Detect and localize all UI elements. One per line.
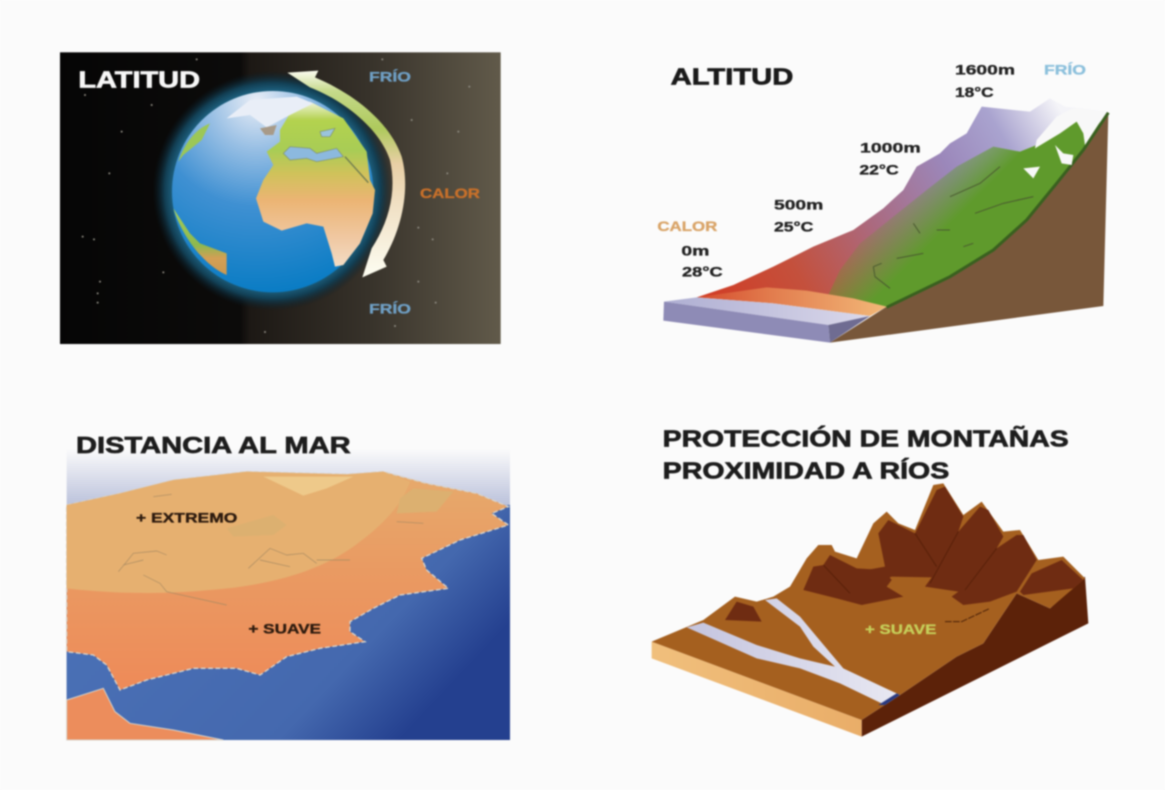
british isles xyxy=(260,125,277,135)
south america xyxy=(173,208,227,275)
label: 500m: 500m xyxy=(774,197,823,213)
arrow: temperature arc xyxy=(287,71,405,277)
green forest zone xyxy=(828,113,1108,307)
label: 0m: 0m xyxy=(681,242,709,258)
label: frio top: FRÍO xyxy=(369,69,411,85)
southern land xyxy=(67,688,223,740)
inland zone xyxy=(67,472,410,593)
panel: distancia al mar xyxy=(67,432,510,740)
eurasia and africa land xyxy=(256,102,375,267)
title: latitud: LATITUD xyxy=(78,67,200,93)
label: 18C: 18°C xyxy=(955,84,994,100)
slope climate gradient xyxy=(697,98,1108,307)
title line: proteccion de montanas: PROTECCIÓN DE MONTAÑAS xyxy=(663,426,1069,452)
ridge creases xyxy=(823,532,997,593)
plateau tone xyxy=(227,488,453,537)
right mountain shadow xyxy=(1020,560,1083,595)
stars xyxy=(82,58,470,333)
coastal shelf xyxy=(663,297,870,343)
snow patches xyxy=(1023,108,1107,178)
shelf top xyxy=(664,297,870,325)
space background xyxy=(60,52,501,344)
title: distancia al mar: DISTANCIA AL MAR xyxy=(76,432,351,458)
rivers xyxy=(687,598,900,705)
sky xyxy=(67,448,510,740)
river mouth xyxy=(878,693,900,705)
main mountain shadow xyxy=(867,487,1037,605)
black sea xyxy=(320,128,335,137)
globe xyxy=(153,71,393,311)
label: 1000m: 1000m xyxy=(860,139,921,155)
ridge line xyxy=(945,608,990,622)
shelf side xyxy=(828,316,870,343)
label: frio bottom: FRÍO xyxy=(369,300,411,316)
label: calor: CALOR xyxy=(420,185,480,201)
label: 22C: 22°C xyxy=(859,161,899,177)
light northern area xyxy=(263,477,353,496)
ocean xyxy=(172,91,373,292)
left mountain shadow xyxy=(803,555,903,605)
mediterranean xyxy=(283,147,343,162)
panel: latitud xyxy=(60,52,501,344)
dark forest edge xyxy=(887,113,1108,307)
panel: proteccion de montanas xyxy=(652,426,1088,737)
sea xyxy=(67,505,510,740)
label: suave: + SUAVE xyxy=(865,621,936,637)
right dark face xyxy=(862,577,1088,737)
rock body xyxy=(830,113,1108,343)
mainland xyxy=(67,472,508,690)
panel: altitud xyxy=(657,62,1108,343)
beach xyxy=(697,287,887,316)
shelf front xyxy=(663,302,830,343)
front sand face xyxy=(652,642,862,737)
label: calor: CALOR xyxy=(657,218,717,234)
contour lines xyxy=(873,167,1033,288)
arctic ice xyxy=(227,97,313,127)
atmosphere halo xyxy=(153,71,393,311)
small hill shadow xyxy=(725,602,762,622)
label: frio: FRÍO xyxy=(1044,62,1086,78)
label: 25C: 25°C xyxy=(774,219,813,235)
greenland and north land xyxy=(178,123,210,162)
label: 28C: 28°C xyxy=(682,264,723,280)
relief lines xyxy=(118,494,423,605)
red sea line xyxy=(345,157,368,183)
label: 1600m: 1600m xyxy=(955,62,1015,78)
title line: proximidad a rios: PROXIMIDAD A RÍOS xyxy=(663,458,949,484)
title: altitud: ALTITUD xyxy=(671,64,793,90)
label: suave: + SUAVE xyxy=(248,621,321,637)
label: extremo: + EXTREMO xyxy=(136,509,237,525)
valley surface xyxy=(652,483,1085,720)
